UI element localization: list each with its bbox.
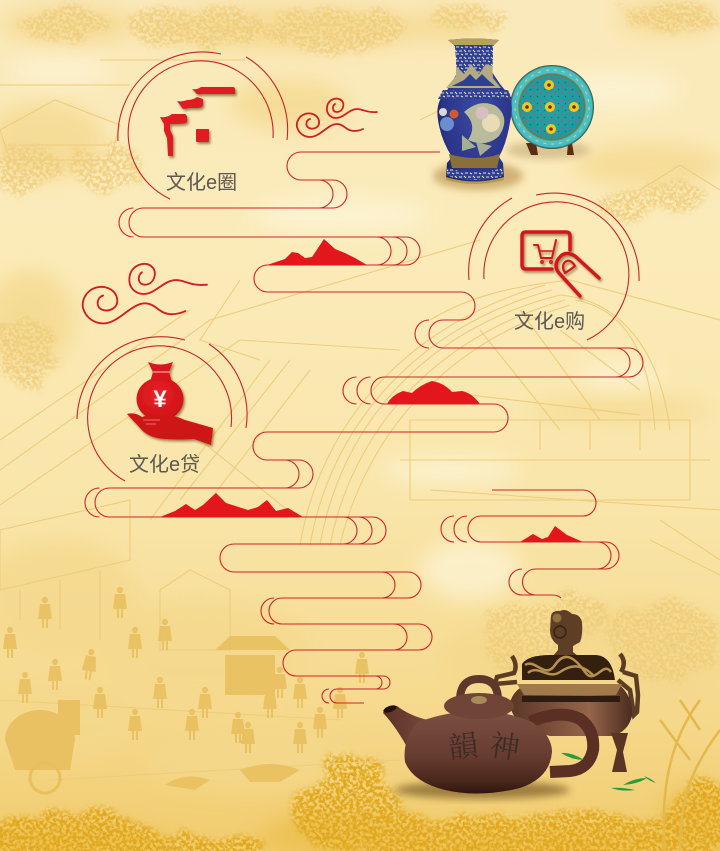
ring arcs: [77, 337, 247, 481]
cloud line: main winding path: [85, 152, 643, 703]
ring arcs: [118, 52, 288, 199]
teapot lid: [444, 693, 514, 719]
censer right leg: [611, 733, 628, 772]
label: 文化e贷: 文化e贷: [129, 453, 200, 476]
teapot spout: [383, 706, 428, 760]
teapot handle: [530, 715, 593, 772]
vase: [437, 38, 512, 184]
teapot calligraphy: 韻: [446, 721, 480, 767]
label: 文化e圈: 文化e圈: [166, 171, 237, 194]
icon: money bag on hand: [127, 362, 213, 445]
teapot knob: [460, 679, 498, 700]
teapot shadow: [394, 781, 570, 799]
censer handles: [495, 654, 638, 715]
yen sign: ¥: [153, 386, 167, 413]
swirl ornament 2: [83, 264, 207, 323]
censer lion finial: [550, 610, 582, 656]
cloud line: right winding path: [441, 490, 619, 598]
icon: cart and pin: [522, 232, 599, 296]
red mountain 4: [520, 526, 583, 542]
illustration: cloisonné vase and plate: [433, 38, 594, 190]
illustration: zisha teapot: [382, 679, 656, 799]
red mountain 3: [160, 493, 303, 517]
teapot body: [405, 711, 552, 794]
label: 文化e购: 文化e购: [514, 310, 585, 333]
illustration: bronze censer: [495, 610, 638, 772]
red mountain 2: [387, 381, 480, 404]
illustration: zisha teapot: 神: [487, 720, 523, 768]
swirl ornament 1: [297, 99, 377, 137]
plate: [510, 65, 594, 155]
panel: 文化e购: [469, 193, 639, 340]
shadow: [433, 162, 523, 190]
panel: 文化e贷: [77, 337, 247, 481]
icon: stepped roof: [160, 87, 235, 156]
golden ground wash: [0, 785, 720, 851]
censer pierced lid: [522, 655, 615, 680]
panel: 文化e圈: [118, 52, 288, 199]
censer body: [510, 686, 632, 736]
red mountain 1: [267, 239, 367, 265]
ring arcs: [469, 193, 639, 340]
bamboo leaves: [561, 753, 656, 791]
